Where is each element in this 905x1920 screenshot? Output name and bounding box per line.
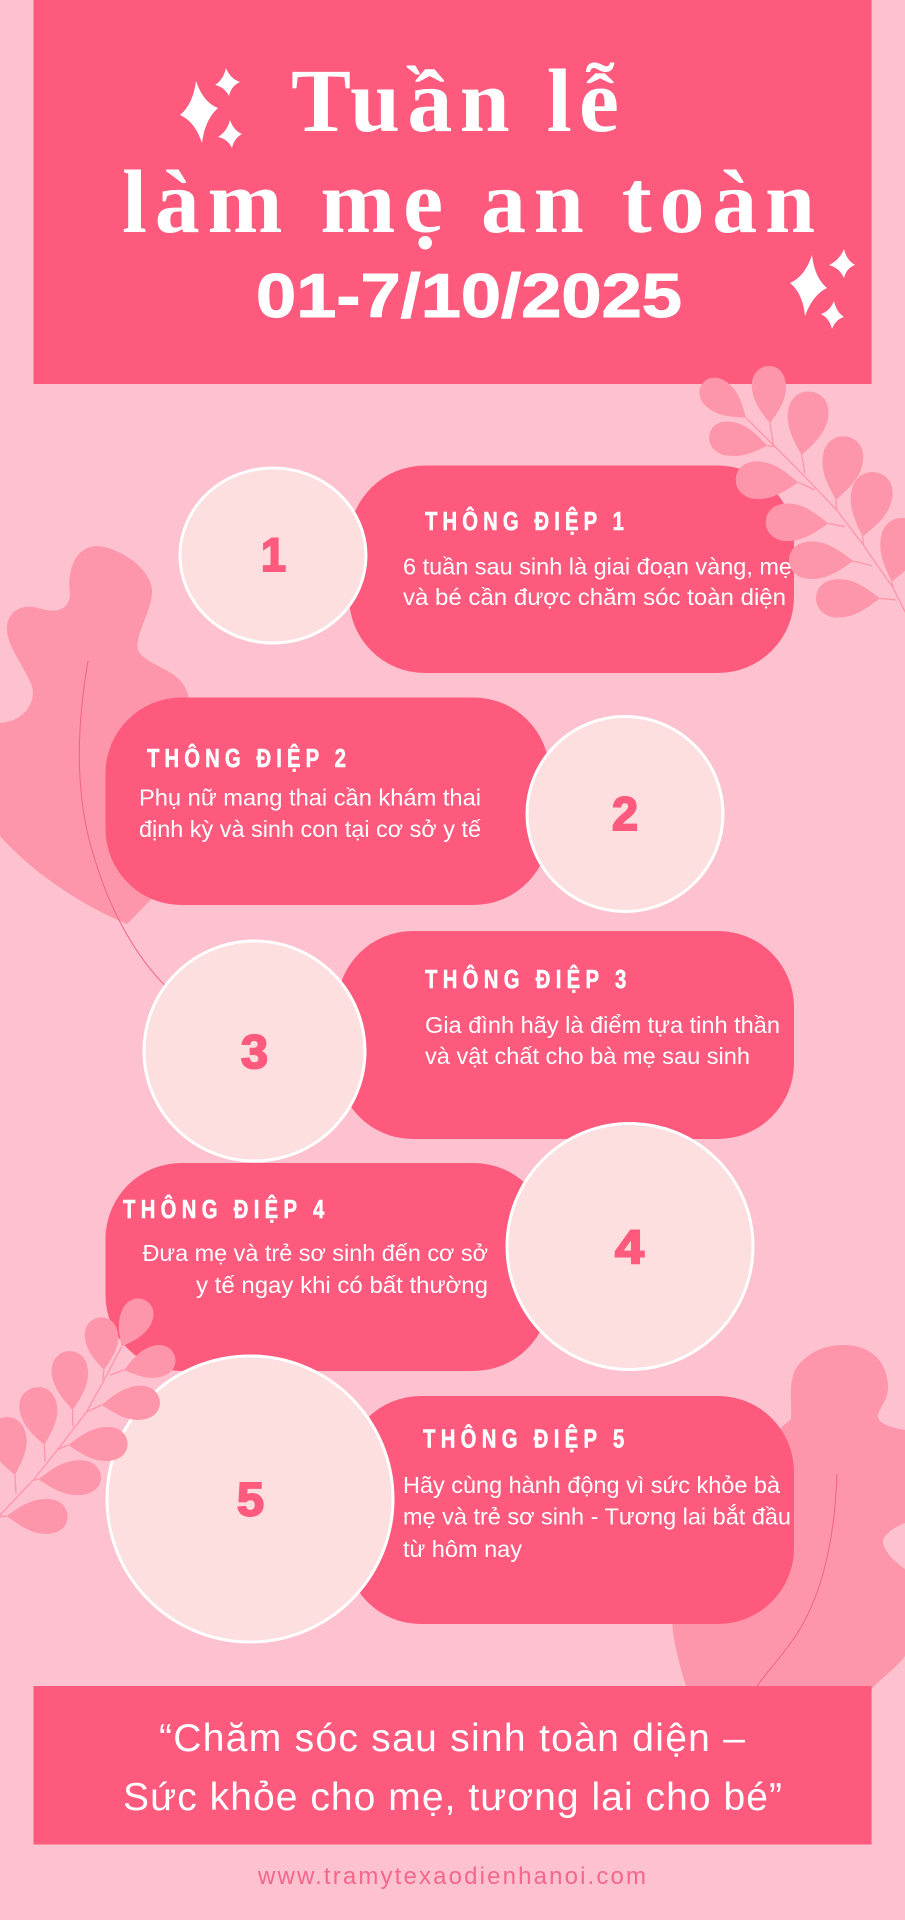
top banner — [34, 0, 872, 384]
card: message 2: định kỳ và sinh con tại cơ sở y tế — [139, 816, 481, 842]
card: message 5: THÔNG ĐIỆP 5 — [423, 1423, 624, 1453]
card: message 3: THÔNG ĐIỆP 3 — [425, 963, 626, 994]
card: message 5: mẹ và trẻ sơ sinh - Tương lai bắt đầu — [403, 1504, 791, 1530]
card: message 5 — [345, 1396, 794, 1624]
card: message 5: Hãy cùng hành động vì sức khỏe bà — [403, 1472, 780, 1498]
circle: number 4: 4 — [615, 1220, 644, 1273]
circle: number 1: 1 — [261, 528, 286, 581]
bottom banner with quote — [34, 1686, 872, 1844]
card: message 5: từ hôm nay — [403, 1536, 522, 1562]
card: message 1 — [349, 466, 794, 673]
card: message 3: Gia đình hãy là điểm tựa tinh thần — [425, 1012, 780, 1038]
circle: number 4 — [507, 1124, 753, 1370]
icon: sparkles right — [790, 249, 855, 329]
card: message 4: y tế ngay khi có bất thường — [196, 1272, 488, 1298]
title line 1: Tuần lễ — [291, 52, 619, 151]
decorative branch: bottom left — [0, 1293, 179, 1534]
card: message 1: và bé cần được chăm sóc toàn diện — [403, 584, 786, 610]
bottom banner with quote: Sức khỏe cho mẹ, tương lai cho bé” — [123, 1776, 782, 1819]
card: message 3 — [337, 931, 794, 1139]
circle: number 3 — [144, 941, 365, 1161]
card: message 2 — [106, 698, 550, 905]
card: message 1: 6 tuần sau sinh là giai đoạn vàng, mẹ — [403, 554, 792, 580]
circle: number 2: 2 — [612, 787, 638, 840]
website url: www.tramytexaodienhanoi.com — [257, 1863, 646, 1890]
circle: number 1 — [180, 468, 366, 643]
card: message 4 — [106, 1163, 550, 1371]
date: 01-7/10/2025 — [256, 262, 682, 331]
card: message 4: THÔNG ĐIỆP 4 — [123, 1193, 324, 1224]
bottom banner with quote: “Chăm sóc sau sinh toàn diện – — [159, 1717, 745, 1760]
card: message 3: và vật chất cho bà mẹ sau sinh — [425, 1043, 750, 1069]
circle: number 5: 5 — [237, 1472, 264, 1526]
card: message 2: THÔNG ĐIỆP 2 — [147, 742, 346, 773]
title line 2: làm mẹ an toàn — [122, 153, 815, 252]
circle: number 5 — [107, 1356, 393, 1642]
card: message 4: Đưa mẹ và trẻ sơ sinh đến cơ sở — [142, 1240, 488, 1266]
decorative large leaf: left — [0, 546, 189, 985]
decorative branch: top right — [693, 366, 905, 618]
card: message 2: Phụ nữ mang thai cần khám thai — [139, 784, 481, 810]
circle: number 2 — [527, 716, 723, 912]
decorative large leaf: bottom right — [672, 1345, 905, 1690]
icon: sparkles left — [180, 68, 242, 148]
circle: number 3: 3 — [241, 1025, 268, 1078]
card: message 1: THÔNG ĐIỆP 1 — [425, 505, 624, 536]
